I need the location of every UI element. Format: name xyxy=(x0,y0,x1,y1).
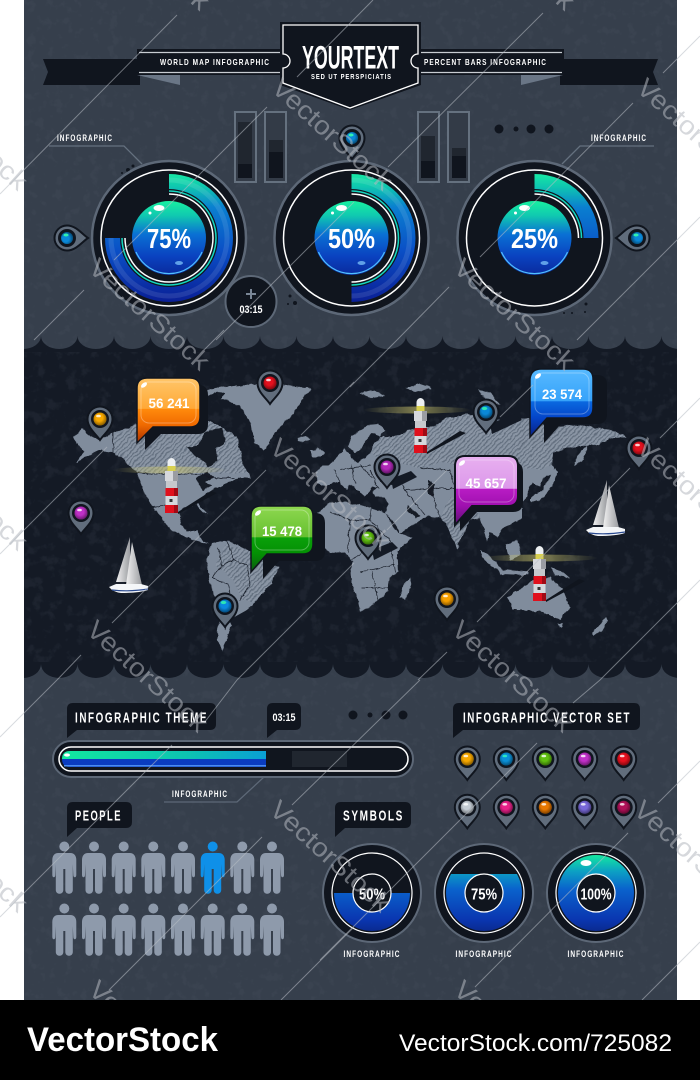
watermark text: VectorStock xyxy=(446,614,580,739)
map pin: orange xyxy=(434,586,460,620)
icon: sailboat west xyxy=(109,537,148,593)
infographic label: top left xyxy=(49,133,142,164)
indicator dots: middle xyxy=(348,710,408,720)
infographic label: top right: INFOGRAPHIC xyxy=(591,133,647,143)
world map xyxy=(73,383,627,652)
lighthouse: australia xyxy=(482,546,598,602)
map pin: blue xyxy=(212,594,255,628)
map pin: purple xyxy=(374,454,417,489)
gauge: 50% xyxy=(274,161,428,315)
timer badge xyxy=(226,276,276,327)
watermark text: VectorStock xyxy=(266,72,400,197)
icon: eye pin top xyxy=(340,126,364,159)
callout: orange 56 241: 56 241 xyxy=(148,395,190,411)
progress bar xyxy=(53,741,413,777)
icon: sailboat east xyxy=(586,480,625,536)
label: time 03:15 xyxy=(267,703,301,738)
callout: green 15 478 xyxy=(251,506,325,579)
symbol gauge: 75% xyxy=(435,844,533,942)
symbol caption: third: INFOGRAPHIC xyxy=(568,949,624,959)
header ribbon: right: PERCENT BARS INFOGRAPHIC xyxy=(424,57,547,67)
symbol gauge: 50% xyxy=(323,844,421,942)
infographic label: top left: INFOGRAPHIC xyxy=(57,133,113,143)
gauge: 25% xyxy=(458,161,612,315)
label: infographic vector set xyxy=(453,703,640,738)
label: infographic theme xyxy=(67,703,216,738)
callout: blue 23 574: 23 574 xyxy=(542,386,582,402)
footer bar xyxy=(0,1000,700,1080)
hatched regions xyxy=(114,414,627,603)
callout: green 15 478: 15 478 xyxy=(262,523,302,539)
header ribbon: right xyxy=(418,49,658,85)
panel: world map band xyxy=(4,336,698,678)
title badge: SED UT PERSPICIATIS xyxy=(311,72,392,81)
callout: blue 23 574 xyxy=(530,369,607,443)
percent bars: right pair xyxy=(418,112,469,182)
map pin: red east xyxy=(626,436,652,469)
infographic label: under progress bar: INFOGRAPHIC xyxy=(172,789,228,799)
header ribbon: left xyxy=(43,49,283,85)
label: symbols xyxy=(335,802,411,837)
country borders xyxy=(113,433,523,630)
title badge: YOURTEXT xyxy=(302,40,399,76)
grunge splatter xyxy=(121,164,588,314)
watermark text: VectorStock xyxy=(264,794,398,919)
map pin: teal xyxy=(474,400,522,434)
map pin: magenta xyxy=(68,500,94,534)
timer badge: 03:15 xyxy=(240,304,262,316)
label: infographic theme: INFOGRAPHIC THEME xyxy=(75,710,208,726)
watermark text: VectorStock xyxy=(83,252,217,377)
map pin: red xyxy=(258,370,282,404)
watermark text: VectorStock xyxy=(264,432,398,557)
watermark text: VectorStock xyxy=(448,252,582,377)
hudson bay and seas xyxy=(187,428,435,518)
callout: purple 45 657 xyxy=(455,456,523,531)
gauge: 50%: 50% xyxy=(328,223,375,254)
people pictogram: row one xyxy=(52,842,284,894)
infographic label: under progress bar xyxy=(164,777,264,802)
map pin: green xyxy=(356,526,398,560)
watermark text: VectorStock xyxy=(81,614,215,739)
map pin: yellow xyxy=(88,406,112,440)
pin set: row two xyxy=(455,795,636,828)
footer bar: VectorStock xyxy=(27,1021,218,1059)
gauge: 75%: 75% xyxy=(147,223,191,254)
label: people: PEOPLE xyxy=(75,808,122,824)
symbol caption: second: INFOGRAPHIC xyxy=(456,949,512,959)
gauge: 25%: 25% xyxy=(511,223,558,254)
icon: eye pin right xyxy=(616,226,650,250)
header ribbon: left: WORLD MAP INFOGRAPHIC xyxy=(160,57,270,67)
symbol gauge: 100%: 100% xyxy=(580,886,612,904)
lighthouse: north america xyxy=(113,458,227,514)
people pictogram: row two xyxy=(52,904,284,956)
pin set: row one xyxy=(455,746,636,780)
callout: purple 45 657: 45 657 xyxy=(466,475,507,491)
symbol caption: first: INFOGRAPHIC xyxy=(344,949,400,959)
lighthouse: russia xyxy=(363,398,471,454)
icon: eye pin left xyxy=(54,226,88,250)
symbol gauge: 100% xyxy=(547,844,645,942)
symbol gauge: 50%: 50% xyxy=(359,886,385,904)
label: symbols: SYMBOLS xyxy=(343,808,404,824)
callout: orange 56 241 xyxy=(137,378,208,450)
percent bars: left pair xyxy=(235,112,286,182)
title badge xyxy=(280,22,421,110)
symbol gauge: 75%: 75% xyxy=(471,886,497,904)
label: time 03:15: 03:15 xyxy=(272,712,296,724)
indicator dots: top xyxy=(494,124,554,134)
infographic label: top right xyxy=(562,133,654,164)
gauge: 75% xyxy=(92,161,246,315)
label: people xyxy=(67,802,132,837)
footer bar: VectorStock.com/725082 xyxy=(399,1030,672,1057)
